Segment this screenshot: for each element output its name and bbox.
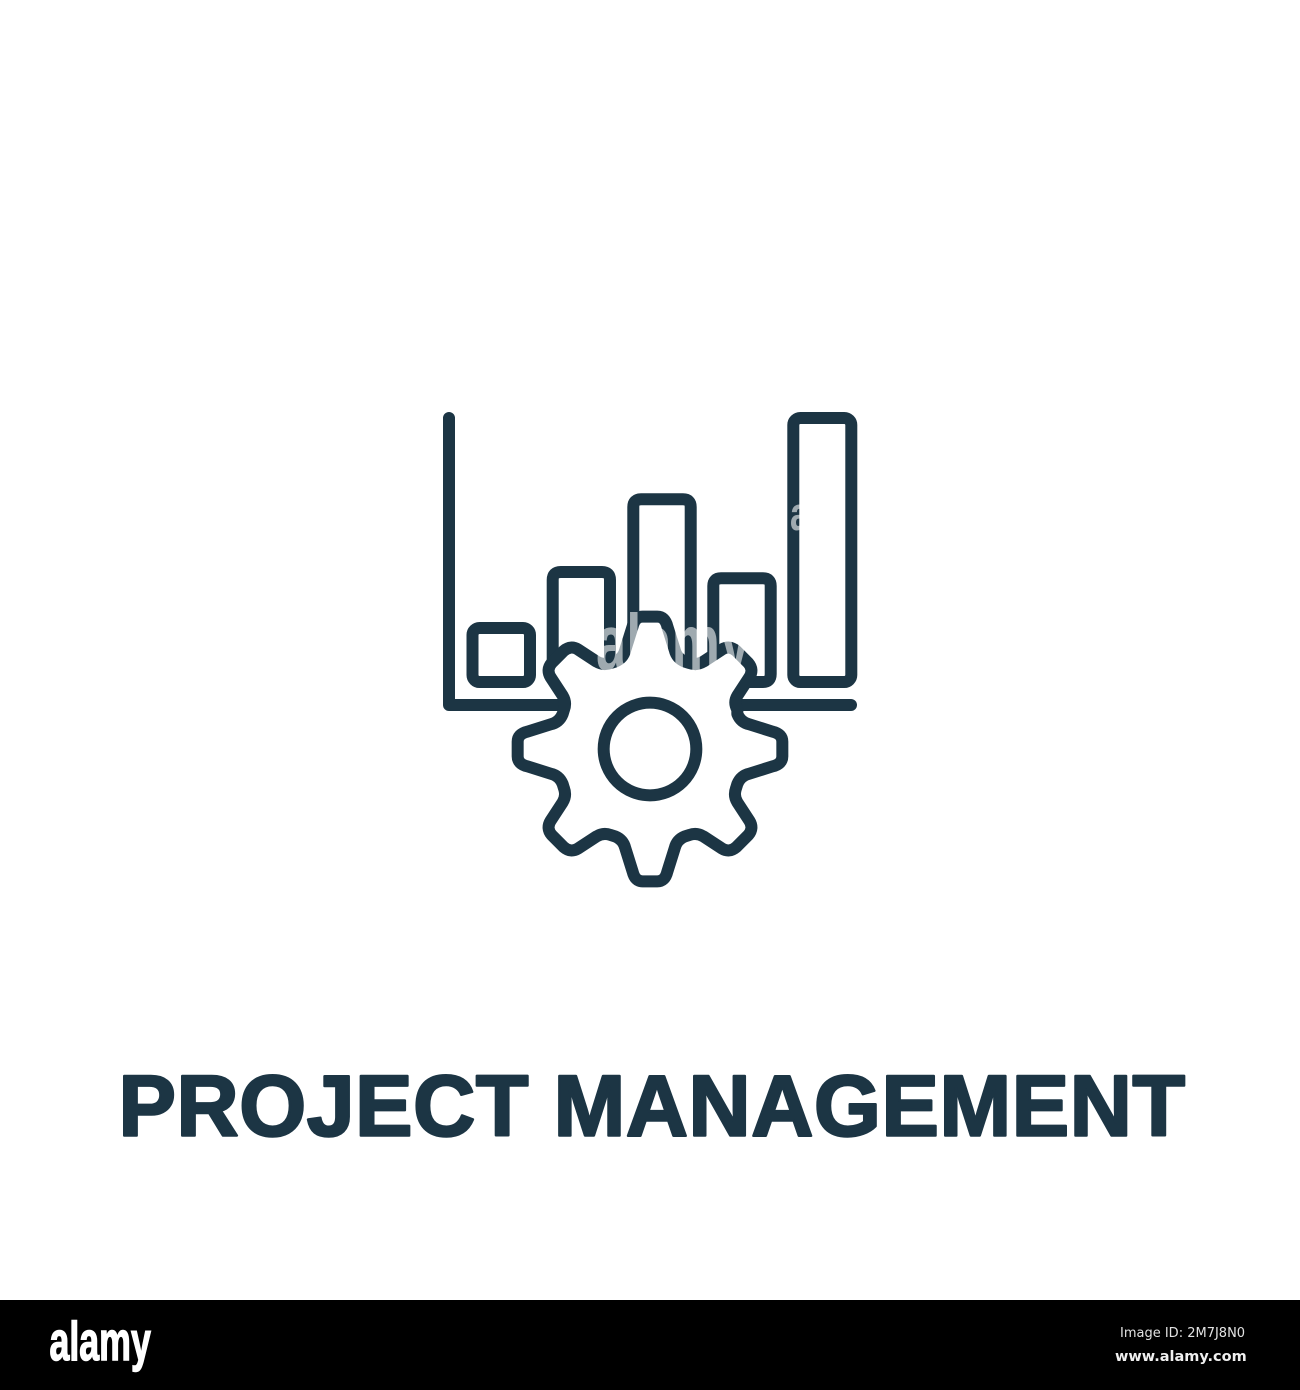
- bar 5: [793, 418, 851, 682]
- gear hub: [604, 703, 696, 795]
- bar 3: [633, 499, 691, 660]
- website: www.alamy.com: [1115, 1349, 1247, 1365]
- watermark over the gear and bars: alamy: [596, 599, 750, 688]
- icon: bar chart with gear: [449, 418, 851, 881]
- gear: [518, 617, 782, 881]
- bar 1: [472, 628, 530, 682]
- title: PROJECT MANAGEMENT: [118, 1058, 1185, 1154]
- chart axes: [449, 418, 851, 705]
- gear outline: [518, 617, 782, 881]
- footer logo: alamy: [50, 1310, 151, 1372]
- footer bar: [0, 1300, 1300, 1390]
- image id: Image ID: 2M7J8N0: [1120, 1326, 1245, 1341]
- bar 2: [553, 572, 610, 660]
- watermark over bar 5: a: [790, 488, 810, 540]
- bar 4: [713, 578, 771, 682]
